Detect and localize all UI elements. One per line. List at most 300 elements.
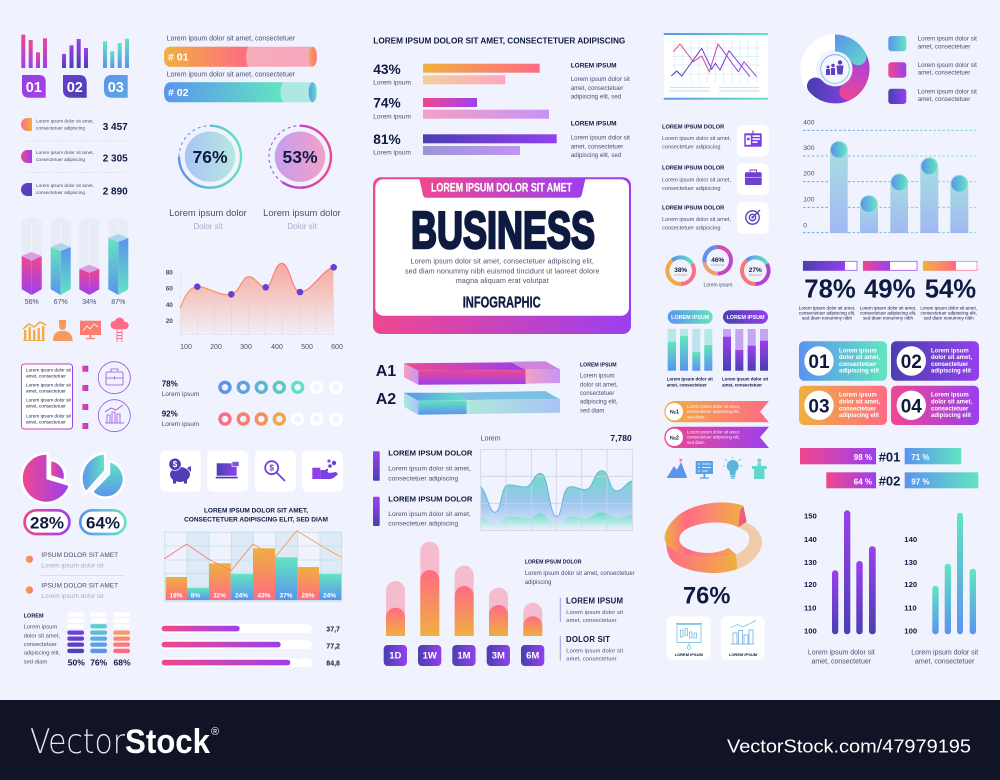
description text: LOREM bbox=[24, 614, 44, 620]
note 2 bbox=[560, 635, 623, 663]
x axis labels: 500 bbox=[301, 344, 313, 351]
block 1: consectetuer adipiscing bbox=[388, 475, 458, 482]
meter 78%: 78% bbox=[162, 380, 178, 389]
card: candlestick board: LOREM IPSUM bbox=[675, 652, 703, 657]
chart: pink bars bbox=[21, 35, 47, 68]
square markers bbox=[82, 366, 88, 429]
stat row 3 bbox=[21, 183, 128, 198]
ribbon No1: sed diam bbox=[687, 414, 705, 419]
donut 38%: Lorem ipsum bbox=[674, 274, 687, 277]
gauge caption right: Dolor sit bbox=[287, 222, 317, 231]
caption bbox=[808, 649, 875, 665]
x axis labels: 200 bbox=[210, 344, 222, 351]
bar A2: A2 bbox=[376, 391, 396, 408]
side text 2 bbox=[571, 121, 630, 159]
ring end face bbox=[738, 506, 747, 527]
side text 1: Lorem ipsum dolor sit bbox=[571, 76, 630, 83]
stat 54% bbox=[920, 261, 977, 321]
icon: monitor bbox=[80, 321, 101, 339]
pill # 02 bbox=[164, 82, 317, 102]
chart: isometric bars bbox=[22, 217, 128, 306]
side text 2: Lorem ipsum dolor sit bbox=[571, 134, 630, 141]
chart: purple thin bars: 110 bbox=[804, 603, 816, 612]
x axis labels: 600 bbox=[331, 344, 343, 351]
stat 78%: Lorem ipsum dolor sit amet, bbox=[799, 305, 855, 310]
panel: icon cards bbox=[160, 451, 343, 492]
capsule 6M: 6M bbox=[526, 651, 539, 662]
progress 77,2: 77,2 bbox=[326, 644, 340, 651]
stat 49% bbox=[860, 261, 917, 321]
note 1: Lorem ipsum dolor sit bbox=[566, 610, 623, 616]
chart: 3D horizontal bars bbox=[376, 361, 618, 415]
card 03: consectetuer bbox=[839, 406, 877, 412]
stat row 1: Lorem ipsum dolor sit amet, bbox=[36, 118, 94, 123]
gauge 76%: 76% bbox=[192, 147, 228, 167]
iso bar 87%: 87% bbox=[111, 299, 125, 306]
card 04: Lorem ipsum bbox=[931, 393, 969, 399]
card 02: dolor sit amet, bbox=[931, 355, 972, 361]
heading: combo chart title bbox=[184, 508, 328, 523]
note 2: DOLOR SIT bbox=[566, 635, 610, 644]
gauge 53% bbox=[269, 126, 331, 188]
donut caption: Lorem ipsum bbox=[704, 282, 732, 288]
ribbon No1: №1 bbox=[670, 410, 679, 416]
text box: amet, consectetuer bbox=[26, 419, 66, 424]
stat 54%: sed diam nonummy nibh bbox=[924, 316, 974, 321]
card 03 bbox=[799, 386, 887, 425]
description text: sed diam bbox=[24, 660, 47, 666]
bar labels: 43% bbox=[257, 593, 271, 600]
row 74%: Lorem ipsum bbox=[373, 113, 411, 120]
bar labels: 18% bbox=[169, 593, 183, 600]
block 1: Lorem ipsum dolor sit amet, bbox=[388, 465, 471, 472]
card 04: 04 bbox=[901, 396, 922, 417]
icon: people bbox=[826, 60, 844, 75]
icon: briefcase in circle bbox=[98, 362, 130, 394]
x axis labels: 300 bbox=[240, 344, 252, 351]
list item: target: consectetuer adipiscing bbox=[662, 226, 720, 232]
bar A1: A1 bbox=[376, 363, 396, 380]
pill label 64% bbox=[80, 510, 125, 534]
stat row 1: 3 457 bbox=[103, 122, 128, 133]
bar caps bbox=[831, 142, 967, 212]
icon card: laptop bbox=[207, 451, 248, 492]
ribbon No2: Lorem ipsum dolor sit amet, bbox=[687, 430, 740, 435]
ribbon No2: №2 bbox=[670, 435, 679, 441]
text box: Lorem ipsum dolor sit bbox=[26, 413, 72, 418]
donut 27%: Lorem ipsum bbox=[749, 274, 762, 277]
icon row: orange icons bbox=[23, 318, 129, 342]
meter 78%: Lorem ipsum bbox=[162, 391, 199, 398]
card 02: 02 bbox=[901, 352, 922, 373]
caption: amet, consectetuer bbox=[915, 658, 975, 665]
row #01 bbox=[800, 448, 961, 464]
y axis labels: 80 bbox=[166, 270, 173, 277]
list item: id card bbox=[662, 125, 769, 157]
card white area bbox=[375, 179, 629, 316]
caption 1: Lorem ipsum dolor sit amet, consectetuer bbox=[167, 36, 296, 43]
panel: business title card bbox=[373, 177, 631, 334]
donut 38%: 38% bbox=[674, 267, 687, 274]
stat row 3: 2 890 bbox=[103, 187, 128, 198]
panel: three big percentages bbox=[799, 261, 977, 321]
bars bbox=[830, 141, 968, 233]
block 2 bbox=[373, 494, 473, 528]
progress 77,2 bbox=[162, 640, 340, 651]
meter 50%: 50% bbox=[68, 658, 85, 668]
bars bbox=[166, 548, 341, 600]
bar labels: 37% bbox=[279, 593, 293, 600]
icon: podium speaker bbox=[752, 458, 767, 479]
bar labels: 32% bbox=[213, 593, 226, 600]
stat 49%: Lorem ipsum dolor sit amet, bbox=[860, 305, 916, 310]
capsule 1M bbox=[452, 566, 476, 666]
stat row 2: consectetuer adipiscing bbox=[36, 157, 85, 162]
description text bbox=[24, 614, 61, 666]
chart: combo bars and line bbox=[164, 531, 342, 602]
donut 27% bbox=[742, 257, 769, 284]
bullet 2 bbox=[26, 583, 118, 600]
y axis labels bbox=[166, 270, 173, 325]
stat 78%: consectetuer adipiscing elit, bbox=[799, 310, 855, 315]
progress 37,7 bbox=[162, 624, 340, 634]
pill # 02: # 02 bbox=[168, 87, 189, 99]
ribbon No1 bbox=[664, 401, 769, 422]
chart: teal bars bbox=[103, 39, 129, 68]
meter 92% bbox=[162, 410, 341, 428]
footer logo bbox=[30, 722, 219, 762]
x axis labels: 100 bbox=[180, 344, 192, 351]
stat 54%: consectetuer adipiscing elit, bbox=[920, 310, 977, 315]
icon card: piggy bank: $ bbox=[173, 460, 178, 469]
list item: target: Lorem ipsum dolor sit amet, bbox=[662, 217, 731, 223]
row #02: 97 % bbox=[911, 477, 930, 486]
donut 27%: 27% bbox=[749, 267, 762, 274]
text box: amet, consectetuer bbox=[26, 374, 66, 379]
panel: paired bars bbox=[373, 62, 630, 159]
A side text: dolor sit amet, bbox=[580, 382, 618, 388]
stat 49%: 49% bbox=[864, 276, 916, 304]
footer logo: Stock bbox=[125, 723, 210, 761]
panel: numbered mini bar charts bbox=[21, 35, 129, 98]
row #01: 71 % bbox=[911, 453, 930, 462]
panel: pie charts bbox=[22, 453, 125, 600]
title: business: BUSINESS bbox=[411, 202, 595, 260]
side text 2: adipiscing elit, sed bbox=[571, 152, 622, 159]
list item: briefcase: consectetuer adipiscing bbox=[662, 186, 720, 192]
row 43%: Lorem ipsum bbox=[373, 80, 411, 87]
chart: wave area chart: 7,780 bbox=[610, 433, 632, 443]
card body text bbox=[405, 258, 600, 285]
iso bar 56%: 56% bbox=[25, 299, 39, 306]
card 04 bbox=[891, 386, 979, 425]
block 2: consectetuer adipiscing bbox=[388, 521, 458, 528]
ribbon No2 bbox=[664, 427, 769, 448]
footer url: VectorStock.com/47979195 bbox=[727, 736, 971, 757]
card 03: Lorem ipsum bbox=[839, 393, 877, 399]
stat row 3: Lorem ipsum dolor sit amet, bbox=[36, 183, 94, 188]
list item: id card: Lorem ipsum dolor sit amet, bbox=[662, 136, 731, 142]
card 03: 03 bbox=[808, 396, 830, 417]
bullet 1: IPSUM DOLOR SIT AMET bbox=[41, 552, 118, 559]
text box: Lorem ipsum dolor sit bbox=[26, 398, 72, 403]
heading: combo chart title: LOREM IPSUM DOLOR SIT AMET, bbox=[204, 508, 308, 515]
capsule 1D: 1D bbox=[389, 651, 402, 662]
side text 2: amet, consectetuer bbox=[571, 143, 623, 150]
card 01: Lorem ipsum bbox=[839, 348, 877, 354]
list item: id card: consectetuer adipiscing bbox=[662, 145, 720, 151]
capsule 3M bbox=[487, 588, 510, 666]
y axis labels: 20 bbox=[166, 318, 173, 325]
card 01: dolor sit amet, bbox=[839, 355, 880, 361]
trend line bbox=[164, 531, 342, 571]
panel: progress bars bbox=[162, 624, 340, 668]
card 01: 01 bbox=[808, 352, 830, 373]
stat 54%: 54% bbox=[925, 276, 976, 304]
row #02: 64 % bbox=[854, 477, 872, 486]
ring wall bbox=[666, 538, 737, 573]
legend item 2: amet, consectetuer bbox=[918, 70, 970, 77]
footer band bbox=[0, 700, 1000, 780]
ring remainder bbox=[736, 522, 762, 569]
capsule 3M: 3M bbox=[492, 651, 505, 662]
panel: bottom icon cards bbox=[667, 616, 765, 660]
chart: area line chart bbox=[166, 263, 343, 351]
badge 03: 03 bbox=[108, 80, 124, 96]
heading: combo chart title: CONSECTETUER ADIPISCING ELIT, SED DIAM bbox=[184, 516, 328, 523]
chart: capsule bars bbox=[384, 542, 544, 666]
list item: target: LOREM IPSUM DOLOR bbox=[662, 205, 724, 211]
donut 46% bbox=[704, 247, 731, 274]
chart: teal thin bars: 110 bbox=[904, 603, 917, 612]
heading: top center: LOREM IPSUM DOLOR SIT AMET, CONSECTETUER ADIPISCING bbox=[373, 36, 625, 45]
axis labels: 100 bbox=[803, 197, 815, 204]
bar labels: 28% bbox=[301, 593, 315, 600]
card 02: adipiscing elit bbox=[931, 369, 971, 375]
card 03: dolor sit amet, bbox=[839, 399, 880, 405]
y axis labels: 60 bbox=[166, 286, 173, 293]
chart: purple thin bars: 100 bbox=[804, 626, 817, 635]
bullet 1: Lorem ipsum dolor sit bbox=[41, 562, 104, 569]
list item: id card: LOREM IPSUM DOLOR bbox=[662, 125, 724, 131]
progress 37,7: 37,7 bbox=[326, 627, 340, 634]
icon row: blue to teal icons bbox=[667, 457, 767, 479]
meter 92%: 92% bbox=[162, 410, 178, 419]
chart: purple thin bars: 120 bbox=[804, 580, 817, 589]
panel: ring dot meters bbox=[162, 380, 341, 428]
gauge 53%: 53% bbox=[282, 147, 318, 167]
panel: pill progress bbox=[164, 36, 317, 102]
stat 78%: sed diam nonummy nibh bbox=[802, 316, 852, 321]
pill label 64%: 64% bbox=[86, 513, 120, 532]
bar labels: 8% bbox=[191, 593, 200, 600]
title tab: LOREM IPSUM DOLOR SIT AMET bbox=[431, 183, 572, 195]
group teal: LOREM IPSUM bbox=[671, 315, 710, 321]
meter 92%: Lorem ipsum bbox=[162, 421, 199, 428]
list item: briefcase: LOREM IPSUM DOLOR bbox=[662, 166, 724, 172]
ribbon No2: sed diam bbox=[687, 440, 705, 445]
y axis labels: 40 bbox=[166, 302, 173, 309]
legend item 2: Lorem ipsum dolor sit bbox=[918, 62, 977, 69]
card 02 bbox=[891, 341, 979, 381]
list item: briefcase: Lorem ipsum dolor sit amet, bbox=[662, 177, 731, 183]
stat row 2: Lorem ipsum dolor sit amet, bbox=[36, 150, 94, 155]
meter 76%: 76% bbox=[90, 658, 108, 668]
group purple bbox=[722, 310, 769, 387]
donut 46%: 46% bbox=[711, 257, 724, 264]
icon card: magnifier bbox=[255, 451, 296, 492]
axis labels: 300 bbox=[803, 145, 815, 152]
progress 84,8 bbox=[162, 658, 340, 668]
row 74%: 74% bbox=[373, 95, 401, 110]
group purple: LOREM IPSUM bbox=[726, 315, 765, 321]
footer logo: Vector bbox=[30, 722, 125, 762]
chart: 3D ring 76% bbox=[665, 502, 762, 609]
caption bbox=[911, 649, 978, 665]
axis labels: 200 bbox=[803, 171, 815, 178]
row #02: #02 bbox=[879, 473, 900, 488]
axis labels: 400 bbox=[803, 119, 815, 126]
legend item 3: amet, consectetuer bbox=[918, 96, 970, 103]
ring top face bbox=[665, 502, 743, 558]
card frame bbox=[373, 177, 631, 334]
caption 2: Lorem ipsum dolor sit amet, consectetuer bbox=[167, 72, 296, 78]
card 04: adipiscing elit bbox=[931, 413, 971, 419]
capsule 1D bbox=[384, 581, 407, 666]
bullet 2: IPSUM DOLOR SIT AMET bbox=[41, 583, 118, 590]
card body text: Lorem ipsum dolor sit amet, consectetuer adipiscing elit, bbox=[411, 258, 594, 266]
bar labels bbox=[169, 593, 336, 600]
icon card: magnifier: $ bbox=[269, 464, 274, 473]
row 81%: 81% bbox=[373, 132, 401, 147]
note heading: Lorem ipsum dolor sit amet, consectetuer bbox=[525, 571, 635, 577]
note 1 bbox=[560, 596, 623, 624]
chart: three mini donuts bbox=[667, 247, 769, 288]
legend: donut bbox=[888, 36, 977, 104]
text box: Lorem ipsum dolor sit bbox=[26, 382, 72, 387]
badge 01: 01 bbox=[26, 80, 42, 96]
gauge caption right: Lorem ipsum dolor bbox=[263, 207, 341, 218]
card: bars with trend: LOREM IPSUM bbox=[729, 652, 758, 657]
note 2: Lorem ipsum dolor sit bbox=[566, 648, 623, 654]
description text: Lorem ipsum bbox=[24, 624, 57, 630]
note 2: amet, consectetuer bbox=[566, 657, 617, 663]
panel: ribbons bbox=[664, 401, 769, 448]
panel: stat list bbox=[21, 118, 131, 198]
note heading: LOREM IPSUM DOLOR bbox=[525, 559, 582, 565]
A side text: consectetuer bbox=[580, 391, 614, 397]
chart: teal thin bars: 130 bbox=[904, 558, 917, 567]
chart: purple bars bbox=[62, 39, 88, 68]
pill # 01 bbox=[164, 47, 317, 67]
pill label 28%: 28% bbox=[30, 513, 64, 532]
x axis labels bbox=[180, 344, 343, 351]
ring percentage: 76% bbox=[683, 583, 730, 609]
bar A2 bbox=[376, 391, 560, 415]
chart: purple thin bars: 140 bbox=[804, 535, 817, 544]
subtitle: infographic: INFOGRAPHIC bbox=[463, 295, 541, 312]
icon card: piggy bank bbox=[160, 451, 201, 492]
chart: column groups bbox=[667, 310, 769, 387]
ribbon No1: consectetuer adipiscing elit, bbox=[687, 409, 740, 414]
panel: labeled text blocks bbox=[373, 449, 473, 528]
donut 46%: Lorem ipsum bbox=[711, 263, 724, 266]
card 04: consectetuer bbox=[931, 406, 969, 412]
side text 1: adipiscing elit, sed bbox=[571, 94, 622, 101]
group teal: Lorem ipsum dolor sit bbox=[667, 376, 713, 381]
icon card: hand with coins bbox=[302, 451, 343, 492]
x axis labels: 400 bbox=[271, 344, 283, 351]
pill # 01: # 01 bbox=[168, 52, 189, 64]
chart: rounded top bars with dashes bbox=[803, 119, 978, 233]
A side text: LOREM IPSUM bbox=[580, 362, 617, 368]
stat row 2 bbox=[21, 150, 128, 164]
card 03: adipiscing elit bbox=[839, 413, 879, 419]
row 43%: 43% bbox=[373, 62, 401, 77]
chart: diverging bars bbox=[800, 448, 978, 488]
icon: mountain bbox=[667, 458, 687, 478]
side text 1 bbox=[571, 62, 630, 101]
text box: amet, consectetuer bbox=[26, 404, 66, 409]
list item: briefcase bbox=[662, 163, 769, 195]
stat 78% bbox=[799, 261, 857, 321]
legend item 3: Lorem ipsum dolor sit bbox=[918, 88, 977, 95]
text box: Lorem ipsum dolor sit bbox=[26, 368, 72, 373]
card 02: consectetuer bbox=[931, 362, 969, 368]
chart: purple thin bars bbox=[804, 510, 876, 665]
ribbon No2: consectetuer adipiscing elit, bbox=[687, 435, 740, 440]
stat 54%: Lorem ipsum dolor sit amet, bbox=[920, 305, 977, 310]
pill label 28% bbox=[25, 510, 69, 534]
A side text: adipiscing elit, bbox=[580, 400, 618, 406]
legend item 1 bbox=[888, 36, 977, 51]
capsule 6M bbox=[521, 603, 544, 666]
group teal bbox=[667, 310, 713, 387]
gauge caption left: Lorem ipsum dolor bbox=[169, 207, 247, 218]
icon: growth chart bbox=[23, 322, 46, 341]
note heading: adipiscing bbox=[525, 580, 551, 586]
caption: amet, consectetuer bbox=[812, 658, 872, 665]
group purple: amet, consectetuer bbox=[722, 382, 762, 387]
chart: teal thin bars: 100 bbox=[904, 626, 917, 635]
chart: purple thin bars: 150 bbox=[804, 512, 817, 521]
gauge caption left: Dolor sit bbox=[193, 222, 223, 231]
group teal: amet, consectetuer bbox=[667, 382, 707, 387]
panel: icon list bbox=[662, 125, 769, 234]
icon: person bbox=[53, 320, 73, 341]
bullet 2: Lorem ipsum dolor sit bbox=[41, 593, 104, 600]
chart: teal thin bars: 120 bbox=[904, 580, 917, 589]
bar labels: 24% bbox=[323, 593, 336, 600]
row 74% bbox=[373, 95, 549, 120]
chart: donut with people bbox=[800, 34, 870, 104]
block 2: Lorem ipsum dolor sit amet, bbox=[388, 511, 471, 518]
stat 78%: 78% bbox=[804, 276, 856, 304]
chart: teal thin bars bbox=[904, 513, 978, 665]
capsule 1W: 1W bbox=[423, 651, 437, 662]
gauge caption right bbox=[263, 207, 341, 231]
badge 02: 02 bbox=[67, 80, 83, 96]
side text 2: LOREM IPSUM bbox=[571, 121, 617, 128]
panel: boxed text with icons bbox=[22, 362, 130, 432]
chart: purple thin bars: 130 bbox=[804, 558, 817, 567]
card 01 bbox=[799, 341, 887, 381]
footer logo: ® bbox=[211, 726, 219, 738]
stat 49%: sed diam nonummy nibh bbox=[863, 316, 913, 321]
legend item 1: Lorem ipsum dolor sit bbox=[918, 36, 977, 43]
iso bar 67%: 67% bbox=[54, 299, 68, 306]
legend item 2 bbox=[888, 62, 977, 78]
